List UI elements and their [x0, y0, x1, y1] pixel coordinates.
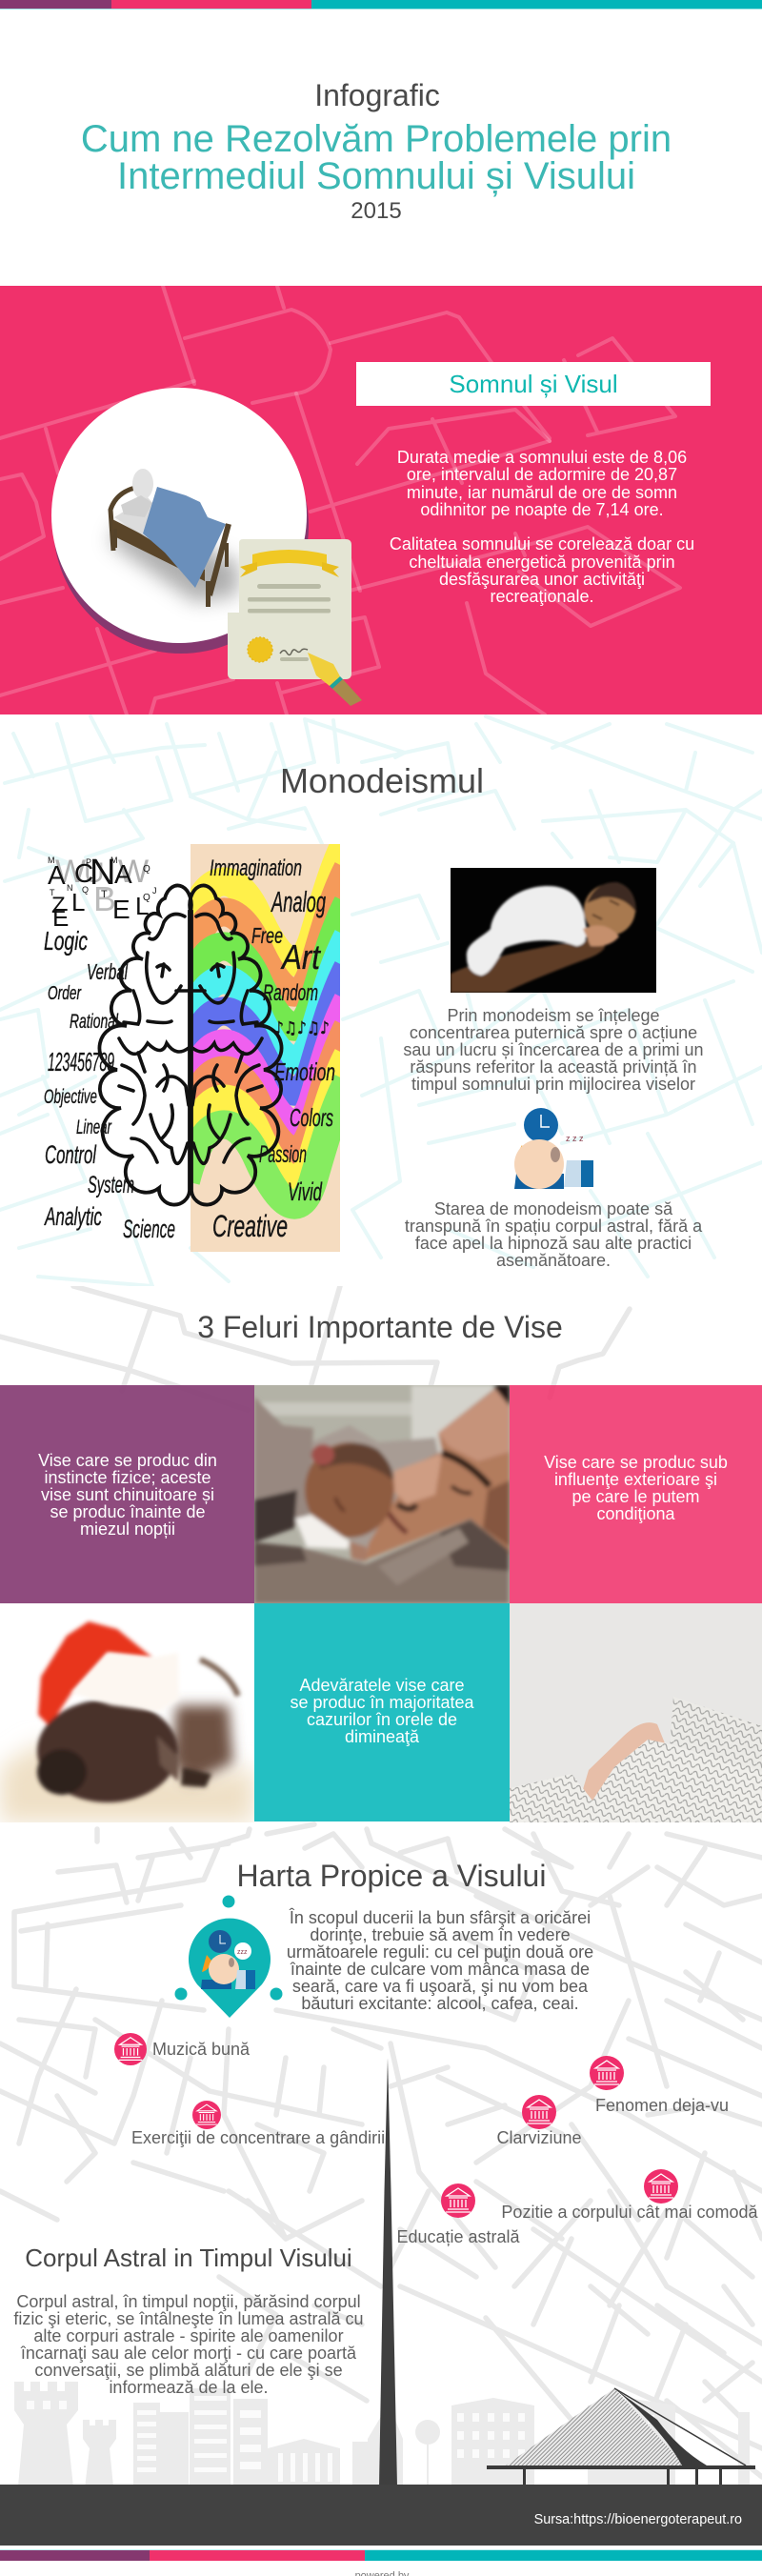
bridge: [487, 2387, 755, 2485]
panel: sleeping figure in circle: [51, 388, 309, 654]
letters jumble: Z: [51, 893, 66, 918]
text: astral state: face apel la hipnoză sau alte practici: [415, 1234, 692, 1253]
right side background: [190, 844, 340, 1252]
text: monodeism definition: Prin monodeism se înțelege: [447, 1006, 660, 1025]
text: purple card: se produc înainte de: [50, 1502, 206, 1521]
map marker: Muzică bună: [114, 2033, 147, 2065]
pillow: [667, 1697, 762, 1822]
top color bar: [0, 0, 762, 10]
duvet: [510, 1740, 762, 1822]
letters jumble: Q: [143, 864, 150, 875]
text: pink card: [544, 1453, 728, 1523]
letters jumble: E: [112, 895, 130, 924]
section heading box: Somnul și Visul: [356, 362, 711, 406]
icon: sleeping person with clock: z z z: [566, 1134, 584, 1143]
label: Clarviziune: Clarviziune: [496, 2128, 582, 2147]
letters jumble: L: [71, 888, 85, 916]
letters jumble: U: [84, 857, 105, 889]
main title: Intermediul Somnului și Visului: [117, 155, 635, 197]
map marker: Fenomen deja-vu: [590, 2056, 624, 2090]
photo: father and newborn: [254, 1385, 510, 1603]
letters jumble: J: [152, 886, 156, 896]
text: astral body: informează de la ele.: [109, 2378, 269, 2397]
text: rules before sleep: În scopul ducerii la bun sfârşit a oricărei: [290, 1908, 591, 1927]
panel: teal dream card: [254, 1603, 510, 1821]
text: rules before sleep: [287, 1907, 593, 2013]
map marker: Poziție: [644, 2169, 678, 2204]
letters jumble: [48, 853, 156, 932]
brain word labels: Vivid: [288, 1177, 323, 1206]
letters jumble: L: [135, 892, 149, 920]
label: Educație astrală: Educație astrală: [396, 2227, 520, 2246]
brain word labels: Linear: [76, 1117, 112, 1138]
letters jumble: N: [90, 853, 115, 893]
brain word labels: Immagination: [210, 855, 302, 881]
white circle: [51, 388, 307, 643]
icon: sleeping person with clock: [514, 1108, 593, 1189]
brain word labels: Order: [48, 983, 82, 1004]
label: Muzică bună: Muzică bună: [152, 2040, 250, 2059]
photo: person under patterned duvet: [510, 1603, 762, 1822]
text: monodeism definition: [403, 1006, 704, 1094]
circle shadow: [53, 398, 309, 654]
text: purple card: [38, 1451, 217, 1539]
letters jumble: A: [48, 860, 66, 890]
label: Poziție: Pozitie a corpului cât mai comodă: [501, 2203, 758, 2222]
text: sleep duration: minute, iar numărul de ore de somn: [407, 483, 677, 502]
text: astral body: fizic şi eteric, se întâlneşte în lumea astrală cu: [13, 2309, 364, 2328]
letters jumble: E: [52, 903, 69, 932]
heading: Monodeismul: Monodeismul: [280, 761, 484, 800]
text: purple card: vise sunt chinuitoare și: [41, 1485, 214, 1504]
text: sleep duration: ore, intervalul de adormire de 20,87: [407, 465, 677, 484]
puppy body: [171, 1705, 233, 1783]
skyline: faded city silhouette: [14, 2382, 750, 2485]
text: purple card: Vise care se produc din: [38, 1451, 217, 1470]
brain word labels: Logic: [44, 926, 88, 956]
text: rules before sleep: înainte de culcare vom mânca masa de: [291, 1960, 590, 1979]
brain word labels: ♪♫♪♫♪: [274, 1018, 330, 1038]
text: rules before sleep: băuturi excitante: alcool, cafea, ceai.: [301, 1994, 579, 2013]
brain word labels: Free: [251, 923, 283, 948]
illustration: person in bed: [110, 469, 238, 607]
brain word labels: Passion: [259, 1141, 307, 1168]
brain word labels: Creative: [212, 1209, 288, 1243]
photo: sleeping baby on arm: [451, 868, 656, 993]
brain word labels: [44, 855, 335, 1243]
letters jumble: T: [101, 889, 108, 900]
heading: 3 Feluri Importante de Vise: 3 Feluri Importante de Vise: [197, 1310, 563, 1344]
brain word labels: Art: [280, 937, 322, 976]
text: sleep duration: Calitatea somnului se corelează doar cu: [390, 534, 694, 553]
section heading box: Somnul și Visul: Somnul și Visul: [449, 370, 618, 398]
brain word labels: Objective: [44, 1086, 97, 1108]
spire: [379, 2059, 397, 2485]
footer band: [0, 2485, 762, 2546]
illustration: certificate with pen: [228, 539, 362, 706]
text: monodeism definition: timpul somnului prin mijlocirea viselor: [411, 1075, 695, 1094]
letters jumble: M: [110, 855, 118, 865]
letters jumble: W: [118, 854, 149, 890]
text: teal card: cazurilor în orele de: [307, 1710, 457, 1729]
text: monodeism definition: concentrarea puternică spre o acțiune: [410, 1023, 697, 1042]
text: astral body: alte corpuri astrale - spirite ale oamenilor: [33, 2326, 344, 2345]
bottom color bar: [0, 2549, 762, 2561]
source: Sursa:https://bioenergoterapeut.ro: [534, 2512, 742, 2527]
letters jumble: Q: [82, 885, 89, 895]
heading: Corpul Astral in Timpul Visului: Corpul Astral in Timpul Visului: [25, 2244, 352, 2272]
text: purple card: instincte fizice; aceste: [44, 1468, 211, 1487]
text: astral state: transpună în spațiu corpul astral, fără a: [405, 1217, 702, 1236]
right brain hemisphere: [190, 885, 282, 1205]
small heading: Infografic: [314, 78, 440, 112]
title block: [81, 78, 672, 224]
brain word labels: Science: [123, 1215, 175, 1243]
text: rules before sleep: seară, care va fi uşoară, şi nu vom bea: [292, 1977, 588, 1996]
text: pink card: influenţe exterioare şi: [554, 1470, 717, 1489]
letters jumble: W: [55, 854, 86, 890]
brain word labels: Control: [45, 1140, 97, 1169]
brain word labels: Rational: [70, 1011, 119, 1033]
text: rules before sleep: dorinţe, trebuie să avem în vedere: [310, 1925, 571, 1944]
brain word labels: 123456789: [48, 1047, 114, 1077]
year: 2015: [351, 198, 402, 224]
text: teal card: [290, 1676, 474, 1746]
text: astral state: asemănătoare.: [496, 1251, 611, 1270]
text: sleep duration: desfăşurarea unor activităţi: [439, 570, 645, 589]
text: monodeism definition: sau un lucru și încercarea de a primi un: [403, 1040, 704, 1059]
letters jumble: N: [67, 883, 72, 893]
label: Fenomen deja-vu: Fenomen deja-vu: [595, 2096, 729, 2115]
letters jumble: M: [48, 855, 55, 865]
text: teal card: Adevăratele vise care: [299, 1676, 465, 1695]
text: sleep duration: [390, 448, 694, 606]
text: astral body: Corpul astral, în timpul nopţii, părăsind corpul: [16, 2292, 361, 2311]
panel: pink dream card: [510, 1385, 762, 1603]
text: pink card: condiţiona: [596, 1504, 675, 1523]
panel: pink section background with map lines: [0, 286, 762, 714]
text: sleep duration: recreaţionale.: [490, 587, 594, 606]
rainbow waves: [186, 838, 348, 1205]
main title: Cum ne Rezolvăm Problemele prin: [81, 118, 672, 160]
text: astral body: conversaţii, se plimbă alături de ele şi se: [34, 2361, 343, 2380]
letters jumble: Q: [143, 893, 150, 903]
text: pink card: pe care le putem: [572, 1487, 700, 1506]
heading: Harta Propice a Visului: Harta Propice a Visului: [237, 1859, 546, 1893]
text: astral body: [13, 2292, 364, 2397]
letters jumble: T: [50, 888, 55, 897]
label: Exerciții: Exerciţii de concentrare a gândirii: [131, 2128, 385, 2147]
left brain hemisphere: [99, 885, 191, 1205]
map marker: Clarviziune: [522, 2095, 556, 2129]
text: purple card: miezul nopții: [80, 1519, 175, 1539]
icon: teal map pin with sleeper: [175, 1896, 282, 2018]
brain word labels: Verbal: [87, 959, 129, 984]
text: sleep duration: cheltuiala energetică provenită prin: [409, 553, 675, 572]
text: teal card: dimineaţă: [345, 1727, 419, 1746]
letters jumble: A: [114, 859, 132, 889]
map lines: pale teal section: [0, 714, 762, 1286]
map marker: Exerciții: [192, 2101, 221, 2129]
text: astral body: încarnaţi sau ale celor morţi - cu care poartă: [21, 2344, 356, 2363]
arm: [581, 1722, 667, 1805]
text: monodeism definition: răspuns referitor la această privință în: [410, 1057, 697, 1077]
map lines: gray section: [0, 1286, 762, 2480]
brain word labels: System: [88, 1172, 134, 1198]
text: sleep duration: odihnitor pe noapte de 7,14 ore.: [420, 500, 664, 519]
main title: [81, 118, 672, 197]
map marker: Educație astrală: [441, 2184, 475, 2218]
brain word labels: Analytic: [44, 1202, 102, 1231]
photo: puppy with santa hat: [0, 1619, 254, 1822]
letters jumble: C: [74, 858, 93, 888]
letters jumble: P: [86, 857, 91, 867]
icon: teal map pin with sleeper: zzz: [237, 1949, 248, 1956]
text: astral state: Starea de monodeism poate să: [434, 1199, 672, 1218]
text: rules before sleep: următoarele reguli: cu cel puţin două ore: [287, 1942, 593, 1962]
panel: purple dream card: [0, 1385, 254, 1603]
text: pink card: Vise care se produc sub: [544, 1453, 728, 1472]
text: teal card: se produc în majoritatea: [290, 1693, 474, 1712]
illustration: brain left and right: [44, 844, 340, 1252]
letters jumble: B: [93, 879, 116, 918]
text: sleep duration: Durata medie a somnului este de 8,06: [397, 448, 687, 467]
text: astral state: [405, 1199, 703, 1270]
